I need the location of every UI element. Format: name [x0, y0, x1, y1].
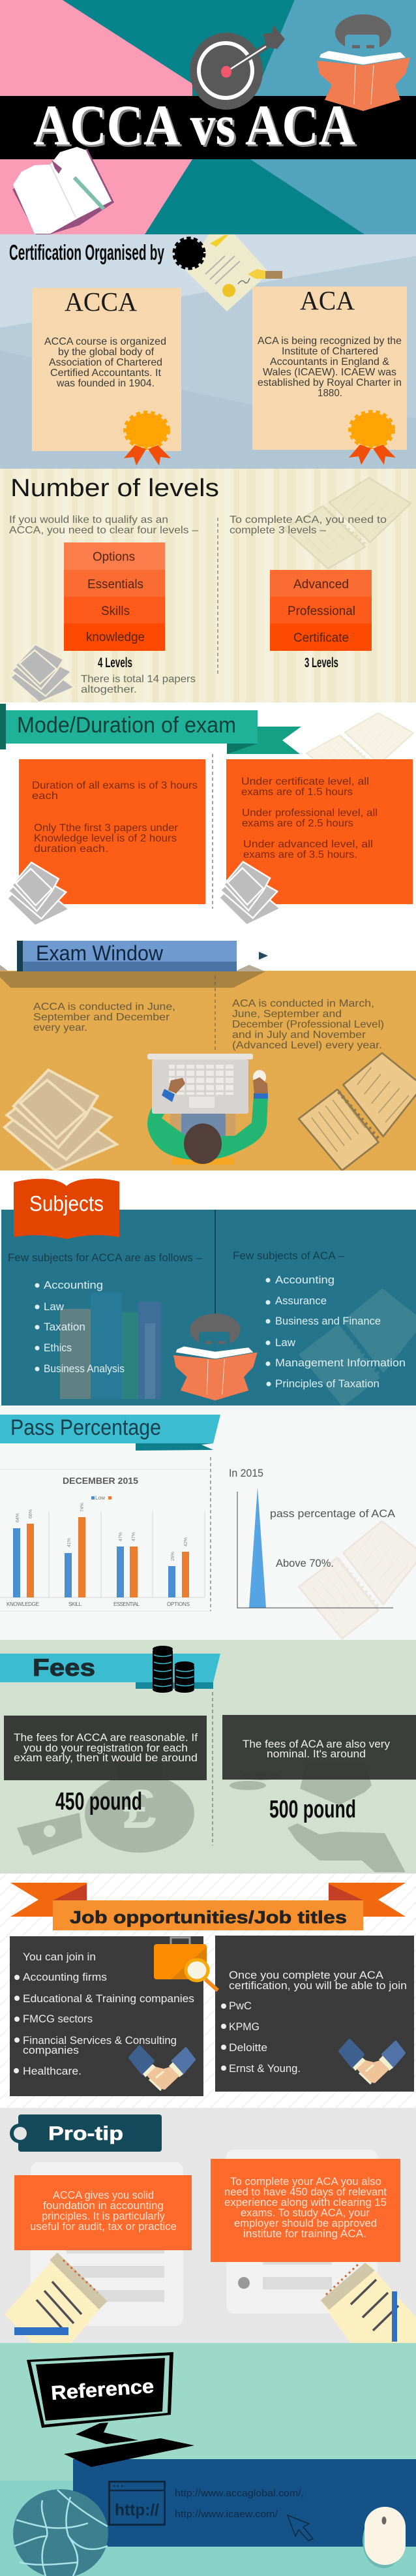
- watermark: books: [60, 1293, 161, 1399]
- bar chart: December 2015: 29%: [171, 1552, 175, 1561]
- box: ACA fees: [222, 1715, 416, 1780]
- ribbon heading: pass percentage: Pass Percentage: [10, 1415, 161, 1440]
- panel: ACA jobs: [215, 1936, 414, 2092]
- tag heading: pro-tip: Pro-tip: [48, 2123, 123, 2144]
- title: ACCA vs ACA: [33, 94, 355, 157]
- text: ACA exam window: and in July and November: [232, 1029, 366, 1041]
- text: total papers: altogether.: [81, 684, 137, 695]
- card: ACA: Wales (ICAEW). ICAEW was: [263, 367, 396, 378]
- text: ACCA exam window: every year.: [33, 1022, 87, 1033]
- box: ACA tip: To complete your ACA you also: [230, 2175, 381, 2188]
- text: ACCA subjects: Law: [44, 1300, 65, 1313]
- text: ACA subjects: Accounting: [275, 1274, 334, 1286]
- chart: ACA level stack: [270, 570, 372, 651]
- icon: open book: [12, 147, 114, 234]
- card: ACCA: was founded in 1904.: [56, 378, 155, 389]
- value: ACA fee: 500 pound: [269, 1796, 356, 1823]
- bar chart: December 2015: SKILL: [68, 1601, 82, 1607]
- icon: computer monitor with heading: [27, 2352, 173, 2444]
- icon: target with arrow: [190, 25, 285, 110]
- banner heading: job opportunities: Job opportunities/Job titles: [70, 1908, 347, 1927]
- box: ACCA duration: Only Tthe first 3 papers under: [34, 823, 179, 834]
- heading tab: subjects: [14, 1178, 119, 1239]
- chart: ACA level stack: Certificate: [293, 631, 349, 645]
- icon: briefcase and magnifier: [154, 1938, 218, 1990]
- panel: ACCA jobs: Accounting firms: [23, 1971, 107, 1983]
- icon: computer monitor with heading: Reference: [50, 2376, 155, 2404]
- chart: ACCA level stack: knowledge: [86, 631, 145, 644]
- icon: black seal: [175, 239, 203, 268]
- icon: person at laptop: [147, 1054, 268, 1165]
- bar chart: December 2015: KNOWLEDGE: [7, 1601, 39, 1607]
- chart: ACA pass percentage: In 2015: [229, 1467, 263, 1479]
- icon: paper stack left: [7, 862, 69, 926]
- watermark: hand and coins: [230, 1763, 406, 1872]
- box: ACA duration: exams are of 2.5 hours: [242, 818, 353, 829]
- card: ACCA: by the global body of: [58, 347, 155, 358]
- box: ACA duration: [226, 759, 413, 904]
- bar chart: December 2015: Low: [95, 1495, 105, 1501]
- text: ACA exam window: December (Professional Level): [232, 1019, 384, 1030]
- text: ACCA exam window: September and December: [33, 1012, 170, 1023]
- chart: ACCA level stack: Options: [93, 550, 135, 564]
- box: ACCA fees: [4, 1716, 207, 1780]
- box: ACA duration: exams are of 3.5 hours.: [243, 849, 357, 860]
- bar chart: December 2015: [0, 1469, 209, 1611]
- watermark: money bag and note: £: [123, 1778, 156, 1840]
- card: ACCA: Certified Accountants. It: [50, 368, 162, 379]
- panel: ACA jobs: Deloitte: [229, 2041, 267, 2054]
- text: ACCA levels intro: [9, 514, 198, 536]
- icon: paper stack: [5, 1070, 117, 1170]
- box: ACA tip: [211, 2159, 400, 2262]
- panel: ACA jobs: certification, you will be able to join: [229, 1979, 407, 1992]
- label: 4 levels: 4 Levels: [98, 655, 132, 670]
- ribbon heading: exam window: Exam Window: [36, 941, 164, 965]
- card: ACCA: ACCA course is organized: [44, 336, 166, 347]
- text: ACA subjects: Assurance: [275, 1295, 327, 1307]
- text: ACCA subjects: Business Analysis: [44, 1362, 125, 1375]
- text: URLs: [175, 2488, 304, 2520]
- box: ACA tip: experience along with clearing 15: [224, 2196, 387, 2208]
- text: ACCA levels intro: If you would like to qualify as an: [9, 514, 168, 526]
- text: ACA subjects: Law: [275, 1336, 296, 1349]
- panel: ACCA jobs: [10, 1936, 203, 2096]
- bar chart: December 2015: 74%: [80, 1503, 85, 1512]
- icon: handshake left: [130, 2047, 194, 2090]
- icon: browser window: [109, 2482, 165, 2525]
- box: ACCA duration: duration each.: [34, 843, 108, 855]
- panel: ACA jobs: Ernst & Young.: [229, 2062, 301, 2075]
- icon: paper stack: [10, 644, 74, 702]
- heading: certification organised by: Certification Organised by: [9, 240, 164, 264]
- text: ACA subjects: Principles of Taxation: [275, 1377, 379, 1390]
- text: ACCA subjects: Ethics: [44, 1342, 72, 1354]
- panel: pro-tip: [0, 2108, 416, 2350]
- label: 3 levels: 3 Levels: [305, 655, 338, 670]
- icon: badge ACCA: [124, 413, 171, 465]
- text: ACA subjects: Few subjects of ACA –: [233, 1249, 345, 1262]
- bar chart: December 2015: DECEMBER 2015: [63, 1475, 138, 1486]
- box: ACCA duration: each: [32, 791, 58, 802]
- text: ACA exam window: [232, 998, 384, 1051]
- text: ACCA subjects: Taxation: [44, 1321, 85, 1333]
- chart: ACA level stack: Professional: [288, 605, 355, 618]
- panel: ACCA jobs: Financial Services & Consulting: [23, 2034, 177, 2047]
- text: ACA subjects: Management Information: [275, 1357, 406, 1369]
- bar chart: December 2015: OPTIONS: [167, 1601, 190, 1607]
- ribbon heading: exam window: [17, 941, 268, 971]
- panel: subjects: [0, 1170, 416, 1406]
- chart: ACA pass percentage: pass percentage of ACA: [270, 1507, 396, 1520]
- panel: pass percentage: [0, 1406, 416, 1640]
- card: ACA: Institute of Chartered: [282, 346, 378, 357]
- box: ACA fees: The fees of ACA are also very: [243, 1738, 390, 1750]
- text: URLs: http://www.icaew.com/: [175, 2509, 278, 2520]
- chart: ACCA level stack: Essentials: [87, 578, 143, 591]
- ribbon heading: mode and duration: Mode/Duration of exam: [17, 713, 236, 738]
- icon: notepad left: [5, 2256, 104, 2350]
- bar chart: December 2015: 68%: [29, 1509, 33, 1518]
- chart: ACA pass percentage: Above 70%.: [276, 1557, 334, 1569]
- icon: globe: [13, 2489, 108, 2576]
- text: ACCA subjects: Accounting: [44, 1279, 103, 1291]
- watermark: money bag and note: [17, 1763, 194, 1855]
- panel: exam window: [0, 941, 416, 1170]
- card: ACA: ACA: [300, 285, 355, 315]
- panel: certification organised by: [0, 234, 416, 469]
- icon: paper stack right: [219, 862, 280, 925]
- text: total papers: There is total 14 papers: [81, 674, 196, 685]
- text: ACCA subjects: Few subjects for ACCA are as follows –: [8, 1251, 203, 1264]
- card: ACA: ACA is being recognized by the: [258, 336, 402, 347]
- bar chart: December 2015: 47%: [132, 1532, 136, 1541]
- text: ACCA exam window: [33, 1001, 175, 1033]
- chart: ACA pass percentage: [229, 1467, 396, 1608]
- bar chart: December 2015: 41%: [67, 1538, 72, 1547]
- text: ACA levels intro: [230, 514, 387, 536]
- chart: ACCA level stack: Skills: [101, 605, 130, 618]
- icon: mouse: [363, 2507, 406, 2568]
- panel: ACA jobs: KPMG: [229, 2020, 260, 2033]
- box: ACCA tip: principles. It is particularly: [42, 2210, 165, 2222]
- text: ACA exam window: (Advanced Level) every year.: [232, 1040, 382, 1051]
- box: ACCA fees: The fees for ACCA are reasonable. If: [14, 1731, 198, 1744]
- box: ACCA fees: exam early, then it would be around: [14, 1751, 198, 1764]
- box: ACA tip: exams. To study ACA, your: [241, 2207, 370, 2219]
- icon: handshake right: [340, 2040, 404, 2084]
- text: ACCA levels intro: ACCA, you need to clear four levels –: [9, 525, 198, 536]
- ribbon heading: pass percentage: [0, 1415, 220, 1451]
- ribbon heading: mode and duration: [0, 704, 301, 754]
- text: total papers: [81, 674, 196, 695]
- text: ACCA subjects: [8, 1251, 203, 1375]
- icon: badge ACA: [349, 413, 396, 465]
- header panel: [0, 0, 416, 234]
- chart: ACCA level stack: [64, 542, 165, 651]
- card: ACA: established by Royal Charter in: [258, 377, 402, 388]
- heading tab: subjects: Subjects: [29, 1191, 104, 1216]
- banner heading: job opportunities: [10, 1883, 406, 1930]
- box: ACA duration: Under advanced level, all: [243, 839, 373, 850]
- panel: ACCA jobs: Educational & Training companies: [23, 1992, 194, 2005]
- box: ACA tip: institute for training ACA.: [243, 2227, 366, 2240]
- panel: ACCA jobs: Healthcare.: [23, 2065, 82, 2077]
- text: ACA levels intro: complete 3 levels –: [230, 525, 326, 536]
- icon: certificate: [186, 234, 282, 311]
- text: ACA exam window: June, September and: [232, 1009, 342, 1020]
- box: ACCA tip: foundation in accounting: [43, 2199, 164, 2212]
- box: ACA tip: need to have 450 days of relevant: [224, 2186, 387, 2198]
- box: ACA duration: Under certificate level, all: [241, 776, 369, 787]
- text: ACCA exam window: ACCA is conducted in June,: [33, 1001, 175, 1013]
- box: ACA duration: Under professional level, all: [242, 808, 378, 819]
- tag heading: pro-tip: [10, 2114, 162, 2152]
- box: ACCA fees: you do your registration for each: [23, 1742, 188, 1754]
- panel: ACA jobs: Once you complete your ACA: [229, 1969, 384, 1981]
- icon: person reading: [173, 1313, 258, 1400]
- box: ACCA duration: Duration of all exams is of 3 hours: [32, 780, 198, 791]
- chart: ACA level stack: Advanced: [293, 578, 349, 591]
- panel: fees: [0, 1640, 416, 1874]
- box: ACCA duration: Knowledge level is of 2 hours: [34, 833, 177, 844]
- icon: notepad right: [321, 2263, 416, 2350]
- box: ACCA tip: useful for audit, tax or practice: [30, 2220, 177, 2233]
- card: ACA: 1880.: [318, 388, 342, 399]
- watermark: notebook: [300, 1289, 416, 1406]
- bar chart: December 2015: ESSENTIAL: [113, 1601, 140, 1607]
- bar chart: December 2015: 64%: [16, 1513, 20, 1522]
- panel: number of levels: [0, 469, 416, 702]
- text: ACA exam window: ACA is conducted in March,: [232, 998, 374, 1009]
- icon: cursor arrow: [288, 2515, 313, 2541]
- ribbon heading: fees: Fees: [33, 1654, 95, 1681]
- panel: ACCA jobs: You can join in: [23, 1951, 96, 1963]
- icon: keyboard: [64, 2438, 194, 2467]
- box: ACCA tip: [14, 2175, 192, 2250]
- panel: reference: [0, 2343, 416, 2576]
- icon: faint notebook: [306, 713, 413, 785]
- panel: ACCA jobs: FMCG sectors: [23, 2013, 93, 2025]
- card: ACCA: [32, 287, 181, 451]
- text: ACA subjects: [233, 1249, 406, 1390]
- box: ACCA duration: [19, 759, 205, 904]
- card: ACA: Accountants in England &: [270, 356, 389, 368]
- watermark: cards: [31, 2150, 378, 2326]
- icon: browser window: http://: [115, 2501, 159, 2519]
- box: ACA duration: exams are of 1.5 hours: [241, 787, 353, 798]
- panel: mode and duration of exam: [0, 702, 416, 971]
- box: ACA fees: nominal. It's around: [267, 1748, 366, 1760]
- bar chart: December 2015: 47%: [119, 1532, 123, 1541]
- card: ACCA: Association of Chartered: [49, 357, 162, 368]
- icon: person reading: [317, 14, 410, 111]
- ribbon heading: fees: [0, 1654, 220, 1689]
- watermark: notebook: [299, 1521, 416, 1639]
- card: ACCA: ACCA: [65, 287, 137, 317]
- text: URLs: http://www.accaglobal.com/,: [175, 2488, 304, 2499]
- panel: ACA jobs: PwC: [229, 2000, 252, 2012]
- icon: coin stacks: [153, 1646, 194, 1693]
- panel: job opportunities: [0, 1874, 416, 2108]
- heading: number of levels: Number of levels: [10, 475, 219, 502]
- text: ACA subjects: Business and Finance: [275, 1315, 381, 1327]
- band: links: [64, 2438, 416, 2547]
- box: ACA tip: employer should be approved: [234, 2217, 377, 2229]
- title: ACCA vs ACA: [35, 96, 357, 159]
- icon: notebook: [299, 1053, 416, 1170]
- icon: faint notebook: [284, 478, 411, 569]
- text: ACA levels intro: To complete ACA, you need to: [230, 514, 387, 526]
- bar chart: December 2015: 42%: [184, 1537, 188, 1547]
- panel: ACCA jobs: companies: [23, 2044, 79, 2056]
- box: ACCA tip: ACCA gives you solid: [53, 2189, 154, 2201]
- card: ACA: [252, 285, 407, 450]
- value: ACCA fee: 450 pound: [55, 1788, 142, 1815]
